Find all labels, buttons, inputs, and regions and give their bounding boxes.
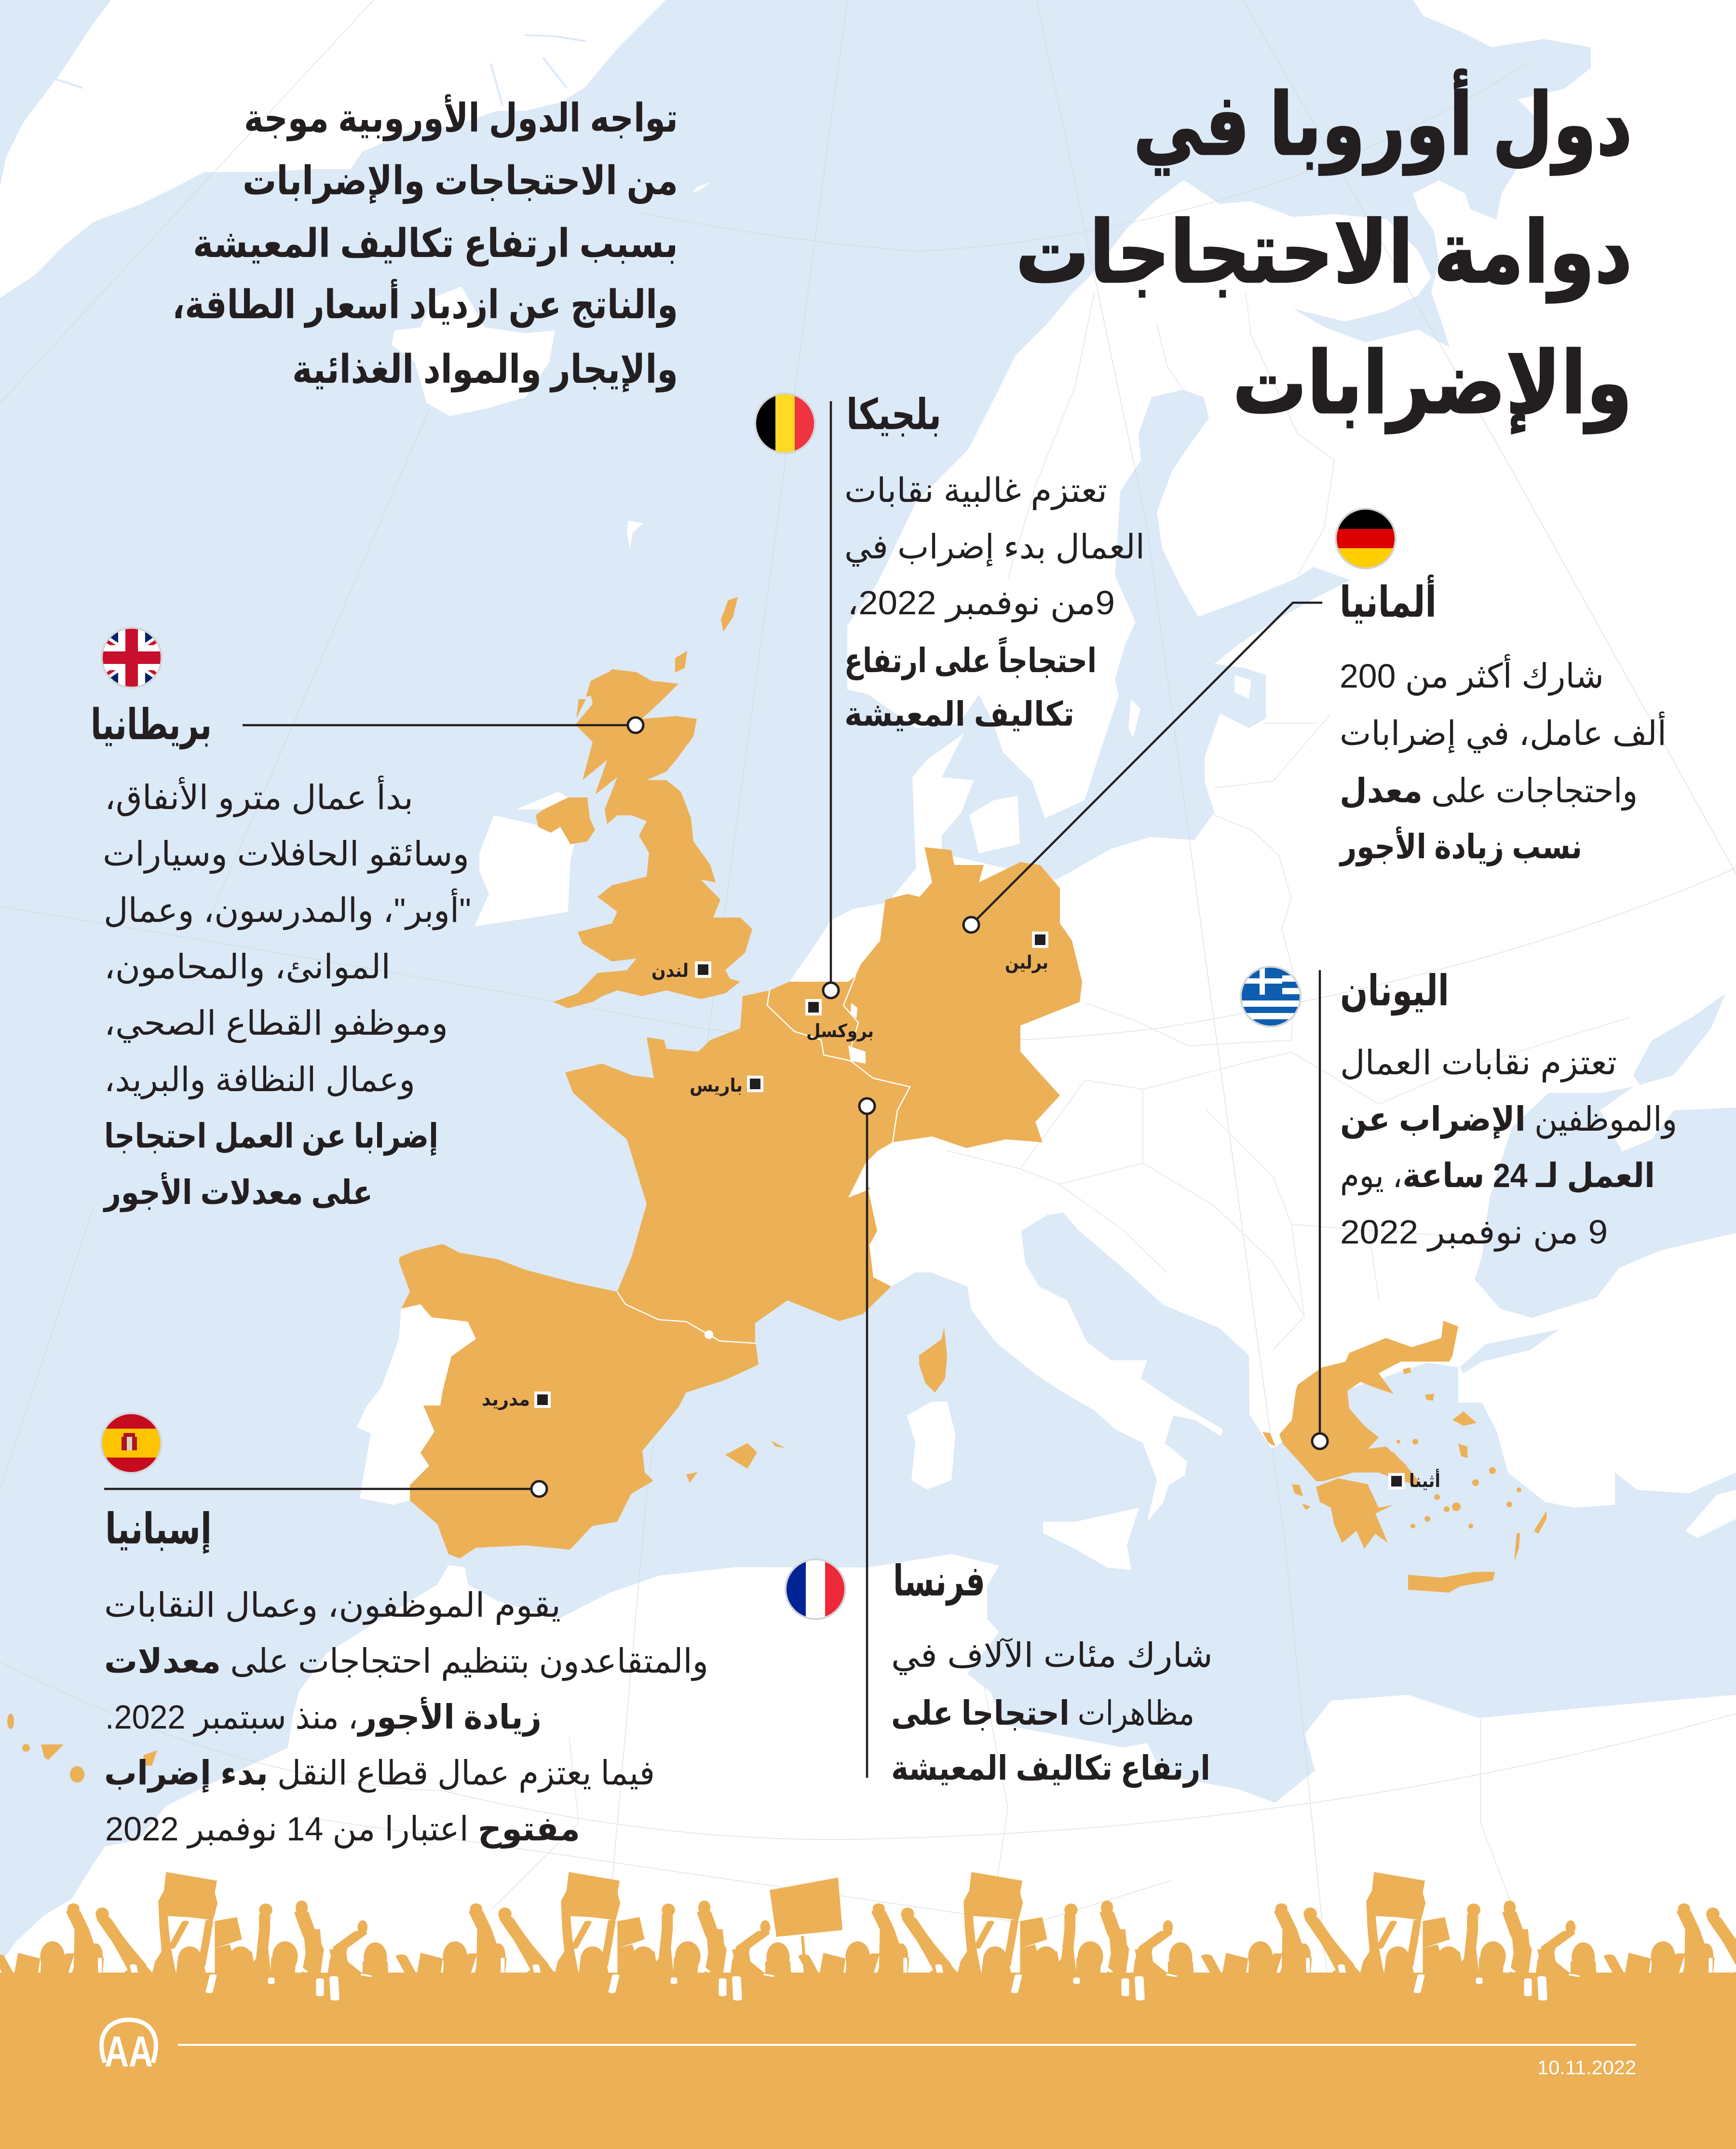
leader line Spain xyxy=(104,1481,547,1497)
body Belgium: 9من نوفمبر 2022، xyxy=(847,584,1115,622)
agency logo: AA xyxy=(105,2028,153,2076)
city: Brussels xyxy=(806,1000,874,1042)
land: Danish islands and Baltic islands xyxy=(969,796,1020,853)
body Germany: شارك أكثر من 200 xyxy=(1340,654,1604,696)
land: Iceland-like island xyxy=(392,286,555,416)
body Belgium xyxy=(844,472,1145,733)
body UK xyxy=(103,775,471,1212)
body France xyxy=(891,1636,1213,1788)
body Spain: والمتقاعدون بتنظيم احتجاجات على معدلات xyxy=(104,1642,708,1681)
city: Athens: أثينا xyxy=(1409,1469,1440,1491)
heading Belgium: بلجيكا xyxy=(846,391,941,438)
heading Greece: اليونان xyxy=(1340,967,1449,1016)
island: Corsica xyxy=(919,1328,947,1392)
body UK: وسائقو الحافلات وسيارات xyxy=(103,835,469,874)
land: Ireland xyxy=(475,815,575,926)
title: دول أوروبا في xyxy=(1133,69,1632,176)
date: 10.11.2022 xyxy=(1537,2056,1636,2079)
agency logo xyxy=(102,2020,156,2076)
body Greece xyxy=(1340,1044,1677,1252)
body Spain xyxy=(104,1586,708,1849)
city: London: لندن xyxy=(651,961,689,981)
body Greece: العمل لـ 24 ساعة، يوم xyxy=(1340,1157,1655,1195)
icon: Spanish flag xyxy=(100,1412,162,1474)
intro text: بسبب ارتفاع تكاليف المعيشة xyxy=(193,222,678,267)
body Greece: 9 من نوفمبر 2022 xyxy=(1340,1213,1608,1252)
heading France: فرنسا xyxy=(893,1557,985,1606)
body Belgium: احتجاجاً على ارتفاع xyxy=(844,637,1097,680)
body Spain: فيما يعتزم عمال قطاع النقل بدء إضراب xyxy=(104,1754,655,1793)
panel: Belgium xyxy=(754,391,1145,998)
city: Madrid: مدريد xyxy=(482,1390,530,1410)
panel: Germany xyxy=(963,508,1667,933)
body Germany xyxy=(1339,654,1667,866)
panel: United Kingdom xyxy=(91,627,643,1212)
land: northern landmass top left xyxy=(0,0,666,298)
body UK: على معدلات الأجور xyxy=(103,1172,373,1212)
body Germany: ألف عامل، في إضرابات xyxy=(1340,711,1667,754)
body France: ارتفاع تكاليف المعيشة xyxy=(891,1749,1210,1788)
icon: French flag xyxy=(785,1558,846,1620)
country: United Kingdom xyxy=(553,669,752,1008)
footer rule xyxy=(178,2044,1636,2046)
body UK: إضرابا عن العمل احتجاجا xyxy=(104,1117,438,1156)
heading UK: بريطانيا xyxy=(91,701,212,749)
land: Sardinia, Sicily, Cyprus xyxy=(907,1402,955,1489)
intro text: والناتج عن ازدياد أسعار الطاقة، xyxy=(172,279,678,328)
Luxembourg and Andorra xyxy=(848,1046,866,1064)
body UK: "أوبر"، والمدرسون، وعمال xyxy=(104,888,471,931)
internal borders xyxy=(617,976,910,1343)
body Germany: نسب زيادة الأجور xyxy=(1339,826,1582,866)
islands: Canary xyxy=(7,1714,157,1783)
city: Berlin xyxy=(1005,933,1048,973)
heading Spain: إسبانيا xyxy=(105,1505,212,1554)
city: Paris: باريس xyxy=(690,1076,743,1096)
sea: Black Sea xyxy=(1475,1087,1736,1318)
heading Germany: ألمانيا xyxy=(1340,574,1437,626)
body UK: الموانئ، والمحامون، xyxy=(104,948,391,987)
protesting crowd silhouette xyxy=(0,1872,1736,2011)
leader line Belgium xyxy=(823,401,839,998)
body Spain: يقوم الموظفون، وعمال النقابات xyxy=(104,1586,561,1625)
leader line UK xyxy=(243,717,643,733)
city: London xyxy=(651,961,710,981)
intro text xyxy=(172,94,678,393)
body France: مظاهرات احتجاجا على xyxy=(891,1694,1194,1733)
land: Eurasia xyxy=(789,0,1736,1522)
title: دوامة الاحتجاجات xyxy=(1016,204,1632,303)
body Belgium: تعتزم غالبية نقابات xyxy=(844,472,1107,510)
body Belgium: تكاليف المعيشة xyxy=(844,695,1074,733)
icon: UK flag xyxy=(101,627,163,689)
body UK: وعمال النظافة والبريد، xyxy=(104,1061,415,1100)
country: France, Belgium and Germany xyxy=(565,847,1082,1343)
title: والإضرابات xyxy=(1233,335,1632,434)
leader line France xyxy=(859,1098,875,1778)
leader line Greece xyxy=(1312,970,1328,1449)
islands: Balearic xyxy=(725,1443,757,1469)
city: Athens xyxy=(1390,1469,1440,1491)
land: North Africa xyxy=(0,1554,1736,2149)
body UK: بدأ عمال مترو الأنفاق، xyxy=(105,775,413,818)
body Belgium: العمال بدء إضراب في xyxy=(844,528,1145,567)
land: Portugal xyxy=(357,1304,476,1505)
body Greece: تعتزم نقابات العمال xyxy=(1340,1044,1617,1082)
body Germany: واحتجاجات على معدل xyxy=(1340,772,1638,811)
panel: Greece xyxy=(1240,966,1677,1449)
panel: Spain xyxy=(100,1412,708,1849)
intro text: تواجه الدول الأوروبية موجة xyxy=(244,94,678,142)
title xyxy=(1016,69,1632,434)
panel: France xyxy=(785,1098,1213,1788)
leader line Germany xyxy=(963,603,1322,933)
icon: Greek flag xyxy=(1240,966,1302,1027)
icon: Belgian flag xyxy=(754,392,816,454)
intro text: من الاحتجاجات والإضرابات xyxy=(243,159,678,204)
body France: شارك مئات الآلاف في xyxy=(891,1636,1213,1676)
highlighted countries xyxy=(7,597,1546,1783)
country: Greece xyxy=(1279,1321,1458,1487)
country: Spain xyxy=(399,1244,759,1558)
sea: Azov and Marmara xyxy=(1633,994,1725,1085)
city: Brussels: بروكسل xyxy=(806,1021,874,1042)
icon: German flag xyxy=(1335,508,1397,569)
country borders xyxy=(492,293,1630,1924)
intro text: والإيجار والمواد الغذائية xyxy=(292,348,678,393)
body Spain: مفتوح اعتبارا من 14 نوفمبر 2022 xyxy=(105,1810,580,1849)
body UK: وموظفو القطاع الصحي، xyxy=(104,1004,448,1043)
body Greece: والموظفين الإضراب عن xyxy=(1340,1100,1677,1139)
city: Berlin: برلين xyxy=(1005,953,1048,973)
capital cities xyxy=(482,933,1440,1491)
body Spain: زيادة الأجور، منذ سبتمبر 2022. xyxy=(105,1697,542,1737)
footer band xyxy=(0,2003,1736,2149)
